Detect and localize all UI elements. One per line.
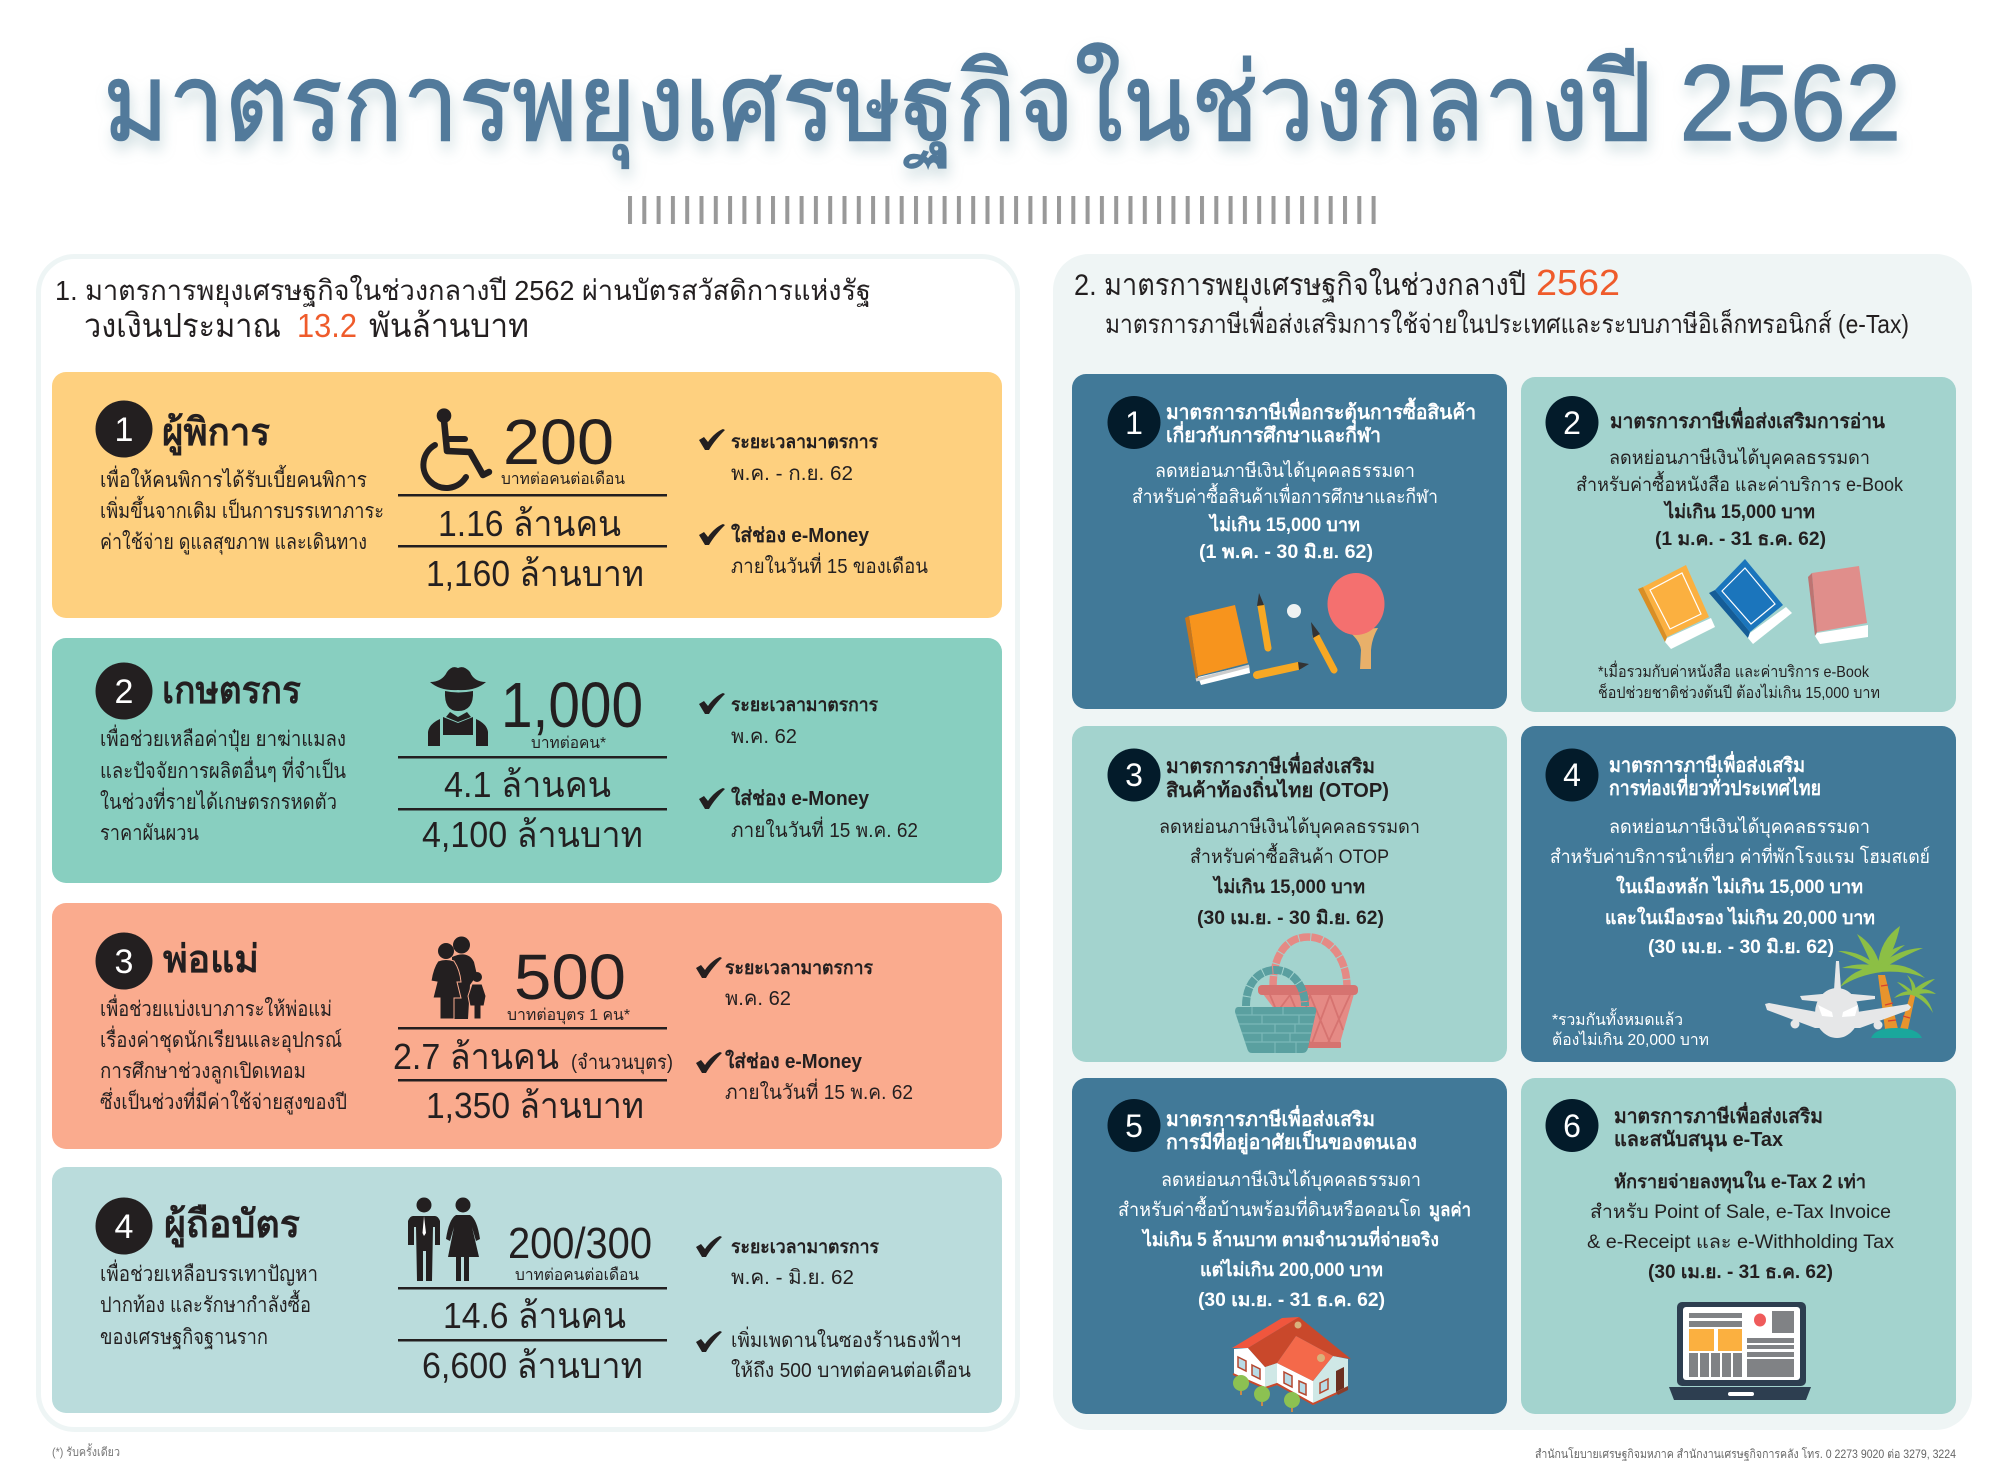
description: เพื่อช่วยเหลือค่าปุ๋ย ยาฆ่าแมลง: [100, 724, 346, 752]
tax card 1: education and sports: [1072, 374, 1507, 709]
description: (30 เม.ย. - 30 มิ.ย. 62): [1648, 937, 1834, 958]
left panel heading: 1. มาตรการพยุงเศรษฐกิจในช่วงกลางปี 2562 ผ่านบัตรสวัสดิการแห่งรัฐ: [55, 274, 871, 308]
check: period: พ.ค. - ก.ย. 62: [731, 463, 853, 485]
description: สำหรับค่าบริการนำเที่ยว ค่าที่พักโรงแรม โฮมสเตย์: [1550, 843, 1930, 868]
description: [1159, 816, 1420, 929]
recipients count: 14.6 ล้านคน: [443, 1295, 626, 1336]
recipients count: 1.16 ล้านคน: [438, 503, 621, 544]
number badge 4: [96, 1198, 152, 1254]
check: e-Money: [699, 786, 918, 842]
panel: left welfare card measures: [38, 256, 1018, 1430]
heading: สินค้าท้องถิ่นไทย (OTOP): [1166, 775, 1389, 802]
recipients count: 2.7 ล้านคน: [393, 1036, 559, 1077]
recipients count: 4.1 ล้านคน: [444, 764, 611, 805]
title: มาตรการพยุงเศรษฐกิจในช่วงกลางปี 2562: [103, 42, 1901, 169]
check: e-Money: ใส่ช่อง e-Money: [731, 523, 870, 547]
check: top-up: ให้ถึง 500 บาทต่อคนต่อเดือน: [731, 1359, 971, 1382]
check: period: [696, 957, 874, 1010]
amount per person: บาทต่อคนต่อเดือน: [501, 470, 625, 488]
description: ไม่เกิน 15,000 บาท: [1208, 513, 1360, 536]
note: *รวมกันทั้งหมดแล้ว: [1552, 1008, 1683, 1029]
description: & e-Receipt และ e-Withholding Tax: [1587, 1232, 1895, 1253]
description: ไม่เกิน 15,000 บาท: [1212, 875, 1365, 898]
right panel heading: 2. มาตรการพยุงเศรษฐกิจในช่วงกลางปี: [1074, 268, 1526, 304]
description: [100, 994, 347, 1115]
card 1: disabled persons: [52, 372, 1002, 618]
heading: มาตรการภาษีเพื่อส่งเสริมการอ่าน: [1610, 406, 1885, 433]
number badge 1: [96, 400, 152, 458]
number badge 1: 1: [115, 411, 133, 449]
right panel heading: [1074, 262, 1909, 339]
tax card 3: OTOP: [1072, 726, 1507, 1062]
description: เพื่อช่วยแบ่งเบาภาระให้พ่อแม่: [100, 994, 332, 1021]
description: ค่าใช้จ่าย ดูแลสุขภาพ และเดินทาง: [100, 530, 367, 555]
budget: 1,160 ล้านบาท: [426, 553, 644, 594]
description: สำหรับค่าซื้อสินค้าเพื่อการศึกษาและกีฬา: [1132, 483, 1438, 508]
illustration: three books: [1638, 559, 1868, 649]
card 2: farmers: [52, 638, 1002, 883]
left panel heading: 13.2: [297, 307, 357, 344]
note: *เมื่อรวมกับค่าหนังสือ และค่าบริการ e-Book: [1598, 660, 1870, 681]
check: period: ระยะเวลามาตรการ: [731, 432, 879, 453]
description: [1576, 447, 1903, 550]
description: ลดหย่อนภาษีเงินได้บุคคลธรรมดา: [1155, 460, 1415, 483]
description: ลดหย่อนภาษีเงินได้บุคคลธรรมดา: [1609, 816, 1870, 839]
check: period: ระยะเวลามาตรการ: [725, 958, 874, 979]
check: period: พ.ค. 62: [731, 726, 797, 748]
note: ช็อปช่วยชาติช่วงต้นปี ต้องไม่เกิน 15,000 บาท: [1598, 682, 1880, 702]
description: ลดหย่อนภาษีเงินได้บุคคลธรรมดา: [1159, 816, 1420, 839]
description: หักรายจ่ายลงทุนใน e-Tax 2 เท่า: [1614, 1170, 1866, 1194]
heading: [1614, 1101, 1823, 1152]
recipients count: [393, 1036, 673, 1077]
heading: การมีที่อยู่อาศัยเป็นของตนเอง: [1166, 1127, 1417, 1156]
amount per person: 200: [503, 406, 614, 478]
description: เพิ่มขึ้นจากเดิม เป็นการบรรเทาภาระ: [100, 496, 384, 523]
description: และในเมืองรอง ไม่เกิน 20,000 บาท: [1605, 906, 1875, 929]
heading: และสนับสนุน e-Tax: [1614, 1129, 1783, 1152]
icon: wheelchair: [423, 408, 489, 488]
number badge 4: [1546, 748, 1598, 802]
check: top-up: [696, 1326, 971, 1382]
amount per person: 1,000: [501, 669, 643, 741]
check: e-Money: [696, 1049, 913, 1104]
description: เพื่อให้คนพิการได้รับเบี้ยคนพิการ: [100, 465, 367, 492]
number badge 3: [1108, 748, 1160, 802]
icon: family: [431, 936, 486, 1019]
description: ไม่เกิน 5 ล้านบาท ตามจำนวนที่จ่ายจริง: [1141, 1226, 1439, 1251]
heading: disabled: ผู้พิการ: [162, 412, 271, 456]
illustration: plane and palms: [1765, 926, 1936, 1038]
number badge 1: 1: [1125, 405, 1143, 441]
description: ลดหย่อนภาษีเงินได้บุคคลธรรมดา: [1161, 1169, 1421, 1192]
icon: farmer: [428, 667, 488, 746]
check: period: [699, 693, 879, 748]
heading: farmers: เกษตรกร: [162, 670, 302, 712]
description: สำหรับค่าซื้อสินค้า OTOP: [1190, 843, 1389, 868]
note: ต้องไม่เกิน 20,000 บาท: [1552, 1030, 1709, 1049]
description: ในเมืองหลัก ไม่เกิน 15,000 บาท: [1616, 875, 1863, 898]
description: สำหรับ Point of Sale, e-Tax Invoice: [1590, 1202, 1891, 1223]
description: มูลค่า: [1429, 1200, 1471, 1222]
description: สำหรับค่าซื้อบ้านพร้อมที่ดินหรือคอนโด: [1118, 1196, 1421, 1221]
footnote: (*) รับครั้งเดียว: [52, 1443, 120, 1459]
budget: 6,600 ล้านบาท: [422, 1345, 643, 1386]
description: ของเศรษฐกิจฐานราก: [100, 1326, 268, 1349]
description: ไม่เกิน 15,000 บาท: [1663, 500, 1815, 523]
description: (30 เม.ย. - 31 ธ.ค. 62): [1648, 1262, 1833, 1283]
description: [1118, 1169, 1471, 1311]
description: ซึ่งเป็นช่วงที่มีค่าใช้จ่ายสูงของปี: [100, 1087, 347, 1115]
description: ราคาผันผวน: [100, 822, 199, 845]
note: [1598, 660, 1880, 702]
right panel heading: มาตรการภาษีเพื่อส่งเสริมการใช้จ่ายในประเทศและระบบภาษีอิเล็กทรอนิกส์ (e-Tax): [1105, 306, 1909, 339]
description: การศึกษาช่วงลูกเปิดเทอม: [100, 1060, 306, 1084]
heading: [1166, 1104, 1417, 1156]
number badge 2: [96, 662, 152, 720]
panel: right tax measures: [1053, 254, 1972, 1430]
description: ปากท้อง และรักษากำลังซื้อ: [100, 1290, 311, 1317]
check: e-Money: ภายในวันที่ 15 พ.ค. 62: [731, 816, 918, 842]
number badge 3: [96, 932, 152, 990]
card 4: card holders: [52, 1167, 1002, 1413]
number badge 6: [1546, 1099, 1598, 1152]
number badge 3: 3: [1125, 757, 1143, 793]
heading: [1166, 397, 1476, 447]
heading: card holders: ผู้ถือบัตร: [164, 1204, 301, 1248]
illustration: book, pencils, ball, paddle: [1185, 573, 1384, 685]
illustration: laptop: [1669, 1302, 1811, 1400]
description: (30 เม.ย. - 31 ธ.ค. 62): [1198, 1290, 1385, 1311]
heading: เกี่ยวกับการศึกษาและกีฬา: [1166, 420, 1381, 447]
heading: มาตรการภาษีเพื่อกระตุ้นการซื้อสินค้า: [1166, 397, 1476, 425]
tax card 4: tourism: [1521, 726, 1956, 1062]
check: e-Money: [699, 523, 928, 578]
budget: 4,100 ล้านบาท: [422, 814, 643, 855]
number badge 5: 5: [1125, 1108, 1143, 1144]
check: period: ระยะเวลามาตรการ: [731, 695, 879, 716]
check: period: ระยะเวลามาตรการ: [731, 1237, 880, 1258]
number badge 4: 4: [115, 1208, 133, 1246]
tax card 6: e-Tax: [1521, 1078, 1956, 1414]
note: [1552, 1008, 1709, 1049]
description: (1 พ.ค. - 30 มิ.ย. 62): [1199, 542, 1373, 563]
check: e-Money: ใส่ช่อง e-Money: [725, 1049, 863, 1073]
check: period: พ.ค. - มิ.ย. 62: [731, 1267, 854, 1289]
description: [1587, 1170, 1895, 1283]
heading: [1166, 751, 1389, 802]
description: เรื่องค่าชุดนักเรียนและอุปกรณ์: [100, 1025, 342, 1053]
number badge 3: 3: [115, 943, 133, 981]
description: ในช่วงที่รายได้เกษตรกรหดตัว: [100, 787, 337, 814]
icon: man and woman: [408, 1198, 480, 1281]
description: (1 ม.ค. - 31 ธ.ค. 62): [1655, 529, 1826, 550]
check: period: [699, 429, 879, 485]
number badge 2: 2: [115, 673, 133, 711]
description: แต่ไม่เกิน 200,000 บาท: [1200, 1258, 1383, 1281]
description: สำหรับค่าซื้อหนังสือ และค่าบริการ e-Book: [1576, 471, 1903, 496]
description: [1550, 816, 1930, 958]
amount per person: 200/300: [508, 1219, 652, 1268]
number badge 2: [1546, 396, 1598, 449]
check: e-Money: ภายในวันที่ 15 พ.ค. 62: [725, 1078, 913, 1104]
check: e-Money: ใส่ช่อง e-Money: [731, 786, 870, 810]
number badge 2: 2: [1563, 405, 1581, 441]
number badge 6: 6: [1563, 1108, 1581, 1144]
budget: 1,350 ล้านบาท: [426, 1085, 644, 1126]
number badge 1: [1108, 396, 1160, 449]
right panel heading: 2562: [1536, 262, 1620, 303]
heading: [1609, 750, 1821, 800]
tax card 5: housing: [1072, 1078, 1507, 1414]
description: [100, 1259, 318, 1349]
description: [1132, 460, 1438, 563]
amount per person: [508, 1219, 652, 1284]
left panel heading: พันล้านบาท: [369, 307, 529, 344]
illustration: house: [1232, 1317, 1351, 1412]
description: [100, 724, 346, 845]
heading: มาตรการภาษีเพื่อส่งเสริม: [1166, 1104, 1375, 1131]
check: top-up: เพิ่มเพดานในซองร้านธงฟ้าฯ: [731, 1326, 961, 1352]
heading: มาตรการภาษีเพื่อส่งเสริม: [1166, 751, 1375, 778]
decorative bars under title: [628, 196, 1379, 224]
tax card 2: reading: [1521, 377, 1956, 712]
description: ลดหย่อนภาษีเงินได้บุคคลธรรมดา: [1609, 447, 1870, 470]
left panel heading: วงเงินประมาณ: [84, 307, 281, 344]
number badge 5: [1108, 1099, 1160, 1152]
description: และปัจจัยการผลิตอื่นๆ ที่จำเป็น: [100, 756, 346, 783]
amount per person: บาทต่อคนต่อเดือน: [515, 1266, 639, 1284]
amount per child: บาทต่อบุตร 1 คน*: [507, 1007, 630, 1025]
illustration: baskets: [1235, 937, 1358, 1053]
left panel heading: [55, 274, 871, 344]
number badge 4: 4: [1563, 757, 1581, 793]
recipients count: (จำนวนบุตร): [571, 1052, 673, 1075]
description: (30 เม.ย. - 30 มิ.ย. 62): [1197, 908, 1384, 929]
check: period: [696, 1236, 880, 1289]
check: e-Money: ภายในวันที่ 15 ของเดือน: [731, 552, 928, 578]
amount per person: บาทต่อคน*: [531, 735, 606, 752]
check: period: พ.ค. 62: [725, 988, 791, 1010]
heading: การท่องเที่ยวทั่วประเทศไทย: [1609, 773, 1821, 800]
description: เพื่อช่วยเหลือบรรเทาปัญหา: [100, 1259, 318, 1286]
card 3: parents: [52, 903, 1002, 1149]
heading: parents: พ่อแม่: [163, 939, 259, 981]
heading: มาตรการภาษีเพื่อส่งเสริม: [1614, 1101, 1823, 1128]
amount per child: 500: [514, 941, 626, 1013]
heading: มาตรการภาษีเพื่อส่งเสริม: [1609, 750, 1805, 777]
description: [100, 465, 384, 555]
